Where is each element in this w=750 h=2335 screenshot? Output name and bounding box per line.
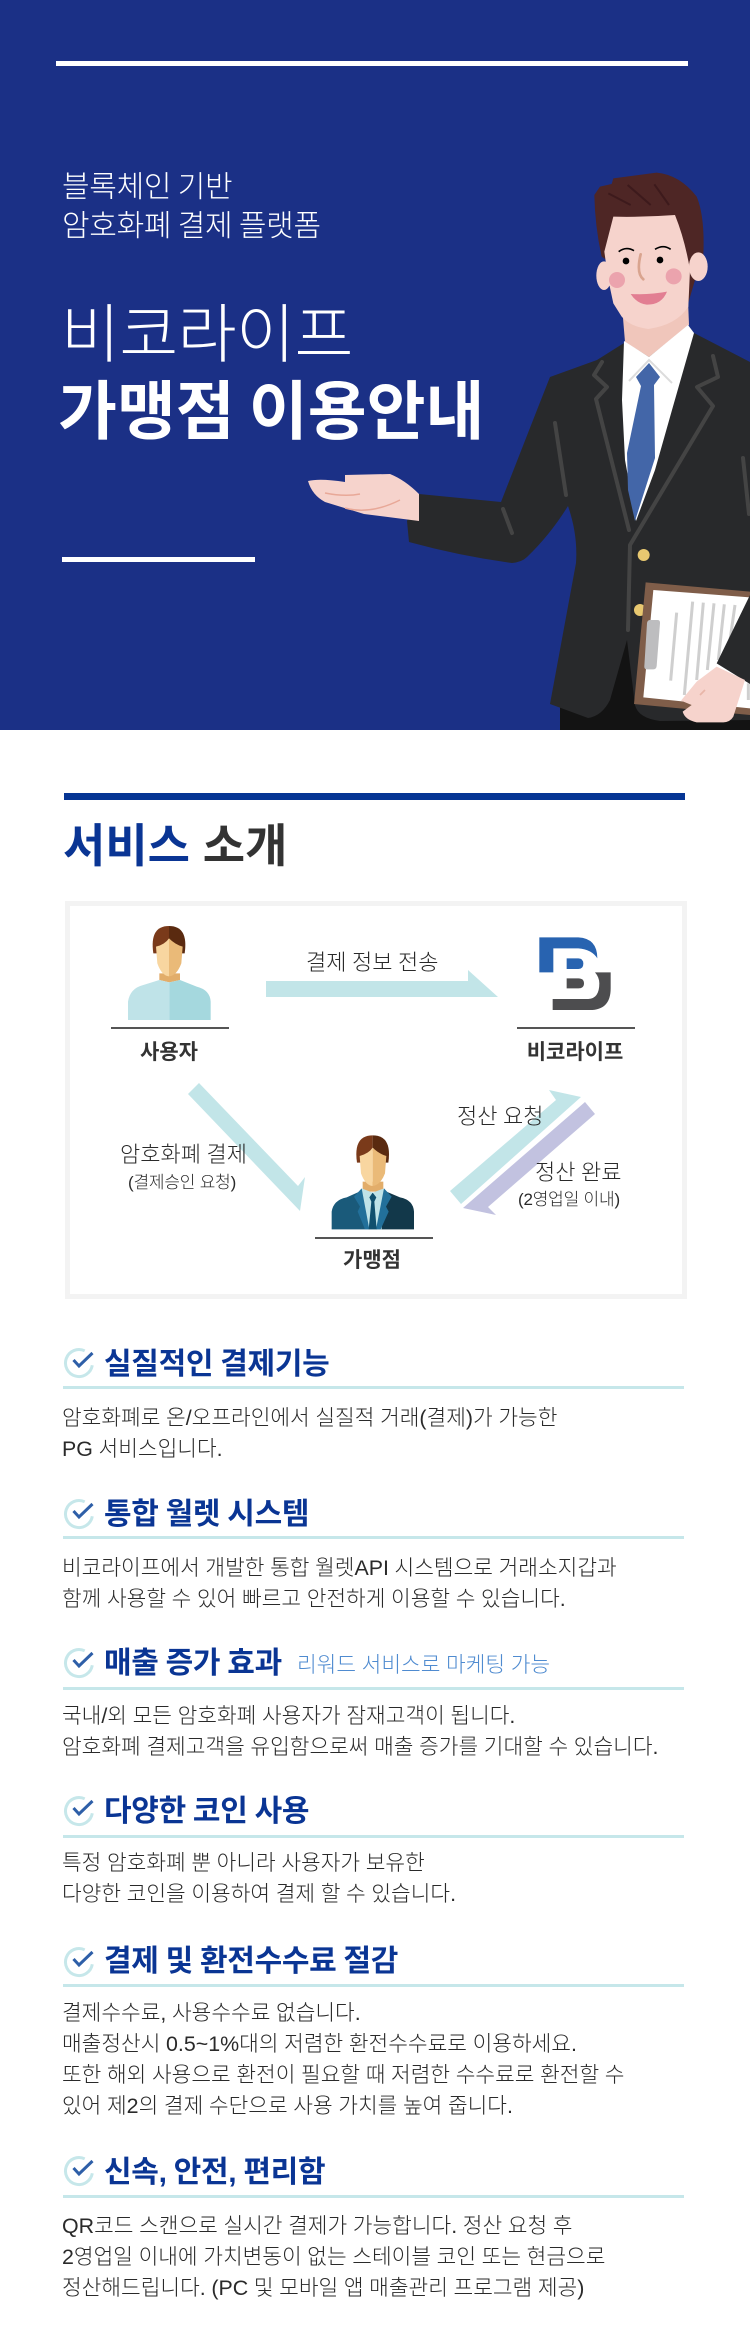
neck [159,973,180,982]
rule [63,2194,684,2198]
heading: 신속, 안전, 편리함 [104,2156,325,2189]
heading: 결제 및 환전수수료 절감 [104,1945,398,1978]
arrow: user to merchant [188,1083,305,1211]
finger crease [700,690,705,695]
sleeve [717,595,750,684]
illustration: businessman presenting [308,172,750,730]
top white rule [56,61,688,66]
rule [63,1984,684,1986]
jacket seams [503,356,749,630]
sub heading: 리워드 서비스로 마케팅 가능 [297,1653,550,1677]
shirt [362,1188,384,1229]
subtitle line 1: 블록체인 기반 [62,171,232,204]
icon: check [64,1348,94,1378]
body line 2: 다양한 코인을 이용하여 결제 할 수 있습니다. [62,1882,456,1906]
heading: 다양한 코인 사용 [104,1795,309,1828]
shirt [622,325,694,521]
icon: check [64,1947,94,1978]
clipboard and holding hand [634,549,750,722]
ears [596,261,612,290]
jacket [407,333,750,721]
merchant underline [315,1237,433,1239]
feature 1 [62,1348,684,1461]
feature 3 [62,1647,684,1759]
body line 2: 매출정산시 0.5~1%대의 저렴한 환전수수료로 이용하세요. [62,2032,577,2056]
body line 1: 국내/외 모든 암호화폐 사용자가 잠재고객이 됩니다. [62,1704,515,1728]
heading: 통합 월렛 시스템 [104,1498,309,1531]
hair and ears [356,1135,373,1163]
label: settlement request: 정산 요청 [457,1104,543,1129]
face [604,215,690,329]
cheeks [609,268,682,288]
tie [369,1193,377,1229]
label: settlement done: 정산 완료 [535,1160,621,1185]
body line 1: 암호화폐로 온/오프라인에서 실질적 거래(결제)가 가능한 [62,1406,557,1430]
body line 2: PG 서비스입니다. [62,1437,223,1461]
hair and ears [153,926,169,953]
neck [363,1182,383,1192]
icon: bcrypt logo [539,937,611,1010]
body line 1: 특정 암호화폐 뿐 아니라 사용자가 보유한 [62,1851,425,1875]
subtitle line 2: 암호화폐 결제 플랫폼 [62,210,321,243]
neck [623,300,689,357]
clipboard board [634,582,750,715]
body line 1: 결제수수료, 사용수수료 없습니다. [62,2001,361,2025]
bcrypt label: 비코라이프 [527,1041,623,1064]
feature 6 [62,2156,684,2300]
label: crypto payment: 암호화폐 결제 [120,1142,247,1167]
rule [63,1536,684,1538]
body line 3: 또한 해외 사용으로 환전이 필요할 때 저렴한 수수료로 환전할 수 [62,2063,624,2087]
body line 3: 정산해드립니다. (PC 및 모바일 앱 매출관리 프로그램 제공) [62,2276,584,2300]
trousers [560,625,750,730]
paper text lines [671,602,748,700]
palm lines [325,493,400,510]
body line 1: QR코드 스캔으로 실시간 결제가 가능합니다. 정산 요청 후 [62,2214,572,2238]
icon: check [64,2156,94,2186]
feature 2 [62,1498,684,1611]
collar line [629,360,672,383]
heading: 매출 증가 효과 [104,1647,282,1680]
icon: check [64,1796,94,1826]
rule [63,1686,684,1690]
mouth [631,292,667,305]
jacket [332,1191,373,1229]
icon: user [128,926,211,1020]
button partly hidden [634,604,646,616]
hair [594,173,704,305]
clip [644,620,660,669]
icon: check [64,1499,94,1530]
shirt [128,980,169,1020]
rule [63,1834,684,1838]
feature 5 [62,1945,684,2118]
section top bar [64,793,685,800]
body line 1: 비코라이프에서 개발한 통합 월렛API 시스템으로 거래소지갑과 [62,1556,617,1580]
label: within 2 business days: (2영업일 이내) [518,1190,620,1209]
heading: 실질적인 결제기능 [104,1348,329,1381]
hero banner [0,0,750,730]
body line 2: 2영업일 이내에 가치변동이 없는 스테이블 코인 또는 현금으로 [62,2245,605,2269]
diagram arrows and icons [128,926,611,1230]
body line 2: 암호화폐 결제고객을 유입함으로써 매출 증가를 기대할 수 있습니다. [62,1735,658,1759]
icon: merchant [332,1135,414,1229]
section heading: 서비스 소개 [63,820,287,872]
feature 4 [62,1795,684,1906]
user underline [111,1027,229,1029]
title line 1: 비코라이프 [61,299,353,371]
eyes and brows [619,247,671,264]
button [638,549,650,561]
arrow: merchant to bcrypt [450,1090,581,1204]
panel: service flow diagram [65,901,687,1299]
paper [643,590,750,708]
icon: check [64,1648,94,1678]
pointing hand [308,474,419,521]
lower white rule [62,557,255,562]
body line 2: 함께 사용할 수 있어 빠르고 안전하게 이용할 수 있습니다. [62,1587,566,1611]
title line 2: 가맹점 이용안내 [58,376,484,448]
label: payment info transfer: 결제 정보 전송 [306,950,438,975]
body line 4: 있어 제2의 결제 수단으로 사용 가치를 높여 줍니다. [62,2094,513,2118]
merchant label: 가맹점 [343,1249,401,1272]
arrow: bcrypt to merchant [463,1102,595,1215]
hand [681,667,745,722]
nose [639,254,643,279]
hair strands [608,184,669,205]
arrow: user to bcrypt [266,970,498,997]
necktie [627,363,660,521]
face [156,938,169,976]
face [360,1148,373,1186]
head [594,173,708,329]
rule [63,1386,684,1388]
bcrypt underline [517,1027,635,1029]
label: approval request: (결제승인 요청) [128,1173,236,1192]
user label: 사용자 [140,1041,198,1064]
lapels [354,1188,369,1229]
